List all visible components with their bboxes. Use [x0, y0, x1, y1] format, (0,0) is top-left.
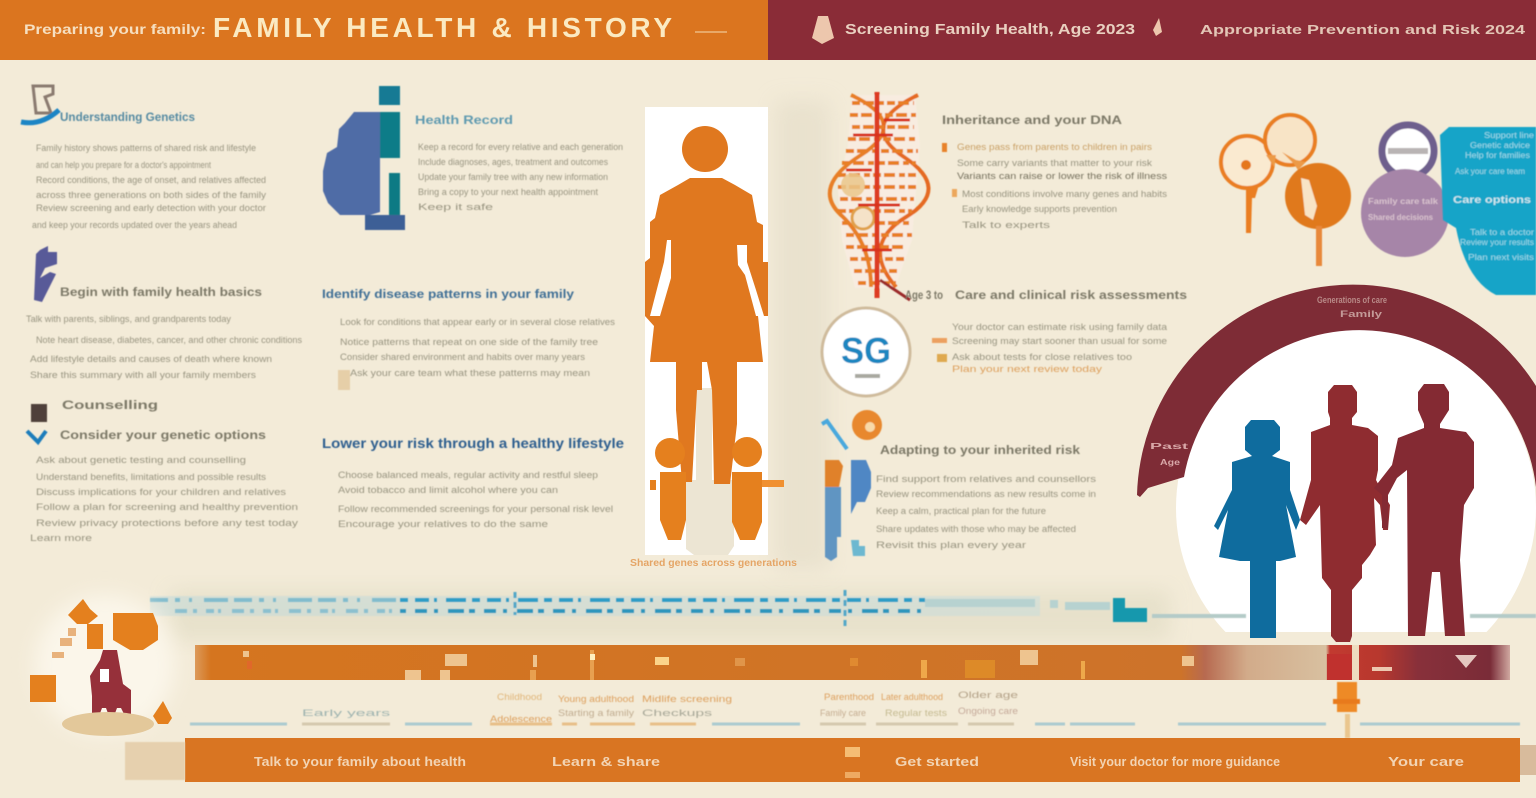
panel: second column lower	[322, 435, 624, 529]
body text: Ask about genetic testing and counselling	[36, 455, 246, 465]
body text: Talk with parents, siblings, and grandparents today	[26, 314, 231, 324]
body text: Look for conditions that appear early or in several close relatives	[340, 317, 616, 327]
body text: Choose balanced meals, regular activity and restful sleep	[338, 470, 598, 480]
footer bar: Visit your doctor for more guidance	[1070, 754, 1280, 769]
rule lines	[190, 722, 1520, 726]
orange adult figure	[645, 126, 768, 484]
body text: Talk to experts	[962, 220, 1051, 230]
body text	[26, 314, 302, 380]
icon: person with swoosh	[21, 86, 59, 123]
header kicker text: Preparing your family:	[24, 21, 206, 37]
footer bar: Your care	[1388, 754, 1464, 769]
purple circle	[1361, 169, 1449, 257]
icon: note	[338, 370, 350, 390]
family circle panel	[1137, 284, 1536, 642]
timeline captions: Ongoing care	[958, 706, 1018, 716]
timeline captions: Childhood	[497, 692, 542, 702]
panel: purple circles: Shared decisions	[1368, 213, 1434, 222]
beige floor between figures	[686, 388, 734, 555]
body text: Learn more	[30, 533, 92, 543]
body text	[338, 470, 613, 529]
body text: Encourage your relatives to do the same	[338, 519, 548, 529]
DNA strip	[150, 590, 1536, 628]
maroon man silhouette	[1374, 384, 1474, 636]
body text: across three generations on both sides of the family	[36, 190, 267, 200]
cyan callout text: Talk to a doctor	[1470, 228, 1534, 237]
panel: right-centre top	[942, 113, 1168, 230]
panel: purple circles: Family care talk	[1368, 197, 1439, 206]
heading: Consider your genetic options	[60, 428, 266, 442]
body text: Record conditions, the age of onset, and relatives affected	[36, 175, 266, 185]
body text: Note heart disease, diabetes, cancer, and other chronic conditions	[36, 335, 302, 345]
body text: Follow recommended screenings for your personal risk level	[338, 504, 613, 514]
body text: Understand benefits, limitations and possible results	[36, 472, 267, 482]
body text: Early knowledge supports prevention	[962, 204, 1117, 214]
timeline captions: Adolescence	[490, 714, 552, 724]
footer text: Talk to your family about health	[254, 754, 466, 769]
body text	[32, 143, 267, 230]
body text: Share this summary with all your family members	[30, 370, 257, 380]
timeline captions: Young adulthood	[558, 694, 634, 704]
footer bar	[125, 738, 1536, 782]
timeline markers	[243, 650, 1194, 680]
body text: Variants can raise or lower the risk of illness	[957, 171, 1168, 181]
subheading: Counselling	[62, 398, 158, 412]
body text	[30, 455, 299, 543]
body text: Screening may start sooner than usual for some	[952, 336, 1167, 346]
body text: Keep it safe	[418, 202, 493, 212]
bullets	[942, 143, 957, 197]
arc label: Generations of care	[1317, 295, 1387, 305]
blue child silhouette	[1214, 420, 1300, 638]
body text: Most conditions involve many genes and habits	[962, 189, 1168, 199]
icon: pen	[34, 246, 57, 302]
panel: cyan callouts	[1440, 127, 1536, 295]
body text: Plan your next review today	[952, 364, 1103, 374]
body text: Avoid tobacco and limit alcohol where you can	[338, 485, 558, 495]
panel: cyan callouts: Care options	[1453, 195, 1532, 206]
cyan callout text: Review your results	[1460, 238, 1534, 247]
cyan callout text: Support line	[1484, 131, 1535, 140]
footer bar: Learn & share	[552, 754, 660, 769]
heading: Understanding Genetics	[60, 110, 195, 124]
heading: Lower your risk through a healthy lifestyle	[322, 435, 624, 451]
cyan callout text: Ask your care team	[1455, 167, 1525, 176]
body text: Consider shared environment and habits over many years	[340, 352, 586, 362]
panel: left column lower	[27, 398, 299, 543]
body text: and keep your records updated over the years ahead	[32, 220, 237, 230]
heading: Identify disease patterns in your family	[322, 287, 574, 301]
footer bar: Get started	[895, 754, 979, 769]
maroon markers	[1327, 645, 1477, 680]
panel: purple circles	[1361, 125, 1449, 257]
panel: second column middle	[322, 287, 616, 390]
body text: Keep a calm, practical plan for the future	[876, 506, 1046, 516]
timeline bar	[195, 645, 1510, 680]
cyan callout text: Plan next visits	[1468, 253, 1534, 262]
timeline captions: Early years	[302, 708, 391, 718]
timeline captions: Starting a family	[558, 708, 635, 718]
main title: FAMILY HEALTH & HISTORY	[213, 12, 672, 43]
orange pin	[1333, 682, 1360, 738]
body text: Review screening and early detection with your doctor	[36, 203, 266, 213]
body text: Bring a copy to your next health appointment	[418, 187, 598, 197]
timeline captions: Later adulthood	[881, 692, 943, 702]
cyan callout text	[1455, 131, 1535, 262]
orange child right	[732, 437, 784, 540]
panel: left column middle	[26, 246, 302, 380]
body text: Your doctor can estimate risk using family data	[952, 322, 1167, 332]
body text: Genes pass from parents to children in pairs	[957, 142, 1153, 152]
heading: Health Record	[415, 113, 513, 127]
panel: left column top	[21, 86, 267, 230]
small text before heading: Age 3 to	[905, 288, 943, 302]
heading: Adapting to your inherited risk	[880, 443, 1080, 457]
arc label: Past	[1150, 442, 1189, 451]
orange blocks	[30, 599, 172, 724]
central figure panel	[630, 107, 797, 569]
body text: Family history shows patterns of shared risk and lifestyle	[36, 143, 256, 153]
grey ring	[1382, 125, 1434, 177]
icon: header mark	[1153, 18, 1162, 36]
badge: SG: SG	[841, 330, 891, 371]
body text	[418, 142, 623, 212]
arc label	[1150, 295, 1387, 467]
heading: Inheritance and your DNA	[942, 113, 1122, 127]
body text	[876, 474, 1097, 550]
panel: second column top	[323, 86, 623, 230]
body text: Revisit this plan every year	[876, 540, 1026, 550]
header: maroon info band	[768, 0, 1536, 60]
timeline captions: Regular tests	[885, 708, 948, 718]
body text: Include diagnoses, ages, treatment and outcomes	[418, 157, 608, 167]
timeline captions: Family care	[820, 708, 866, 718]
horizon lines	[1152, 614, 1536, 618]
body text: Notice patterns that repeat on one side of the family tree	[340, 337, 598, 347]
arc label: Age	[1160, 458, 1181, 467]
white glow	[1176, 330, 1536, 632]
icon: small person check	[27, 404, 47, 442]
body text	[957, 142, 1168, 230]
timeline captions: Checkups	[642, 708, 713, 718]
footer fade left	[125, 742, 185, 780]
body text: Some carry variants that matter to your risk	[957, 158, 1153, 168]
ground shadow	[62, 712, 154, 736]
body text: Review privacy protections before any test today	[36, 518, 299, 528]
body text	[340, 317, 616, 378]
cyan callout text: Help for families	[1465, 151, 1530, 160]
badge: SG	[822, 308, 910, 396]
body text: Ask about tests for close relatives too	[952, 352, 1132, 362]
icon: orange gear and blue arm	[822, 410, 882, 561]
orange child left	[650, 438, 686, 540]
timeline captions: Parenthood	[824, 692, 874, 702]
body text: Find support from relatives and counsellors	[876, 474, 1097, 484]
heading: Care and clinical risk assessments	[955, 288, 1187, 302]
header centre text: Screening Family Health, Age 2023	[845, 21, 1135, 38]
bullets	[932, 338, 947, 362]
timeline captions: Older age	[958, 690, 1018, 700]
body text: Ask your care team what these patterns may mean	[350, 368, 590, 378]
body text: Keep a record for every relative and each generation	[418, 142, 623, 152]
arc label: Family	[1340, 309, 1382, 319]
icon: seated blue figure	[323, 86, 405, 230]
body text: Review recommendations as new results come in	[876, 489, 1096, 499]
footer fade right	[1520, 745, 1536, 775]
maroon stroller figure	[90, 650, 131, 716]
header rule	[695, 31, 727, 33]
cyan callout text: Genetic advice	[1470, 141, 1531, 150]
white arm slits	[650, 240, 764, 316]
icon: header figure	[812, 16, 834, 44]
timeline captions: Midlife screening	[642, 694, 732, 704]
body text: Update your family tree with any new information	[418, 172, 608, 182]
body text: and can help you prepare for a doctor's appointment	[36, 160, 211, 170]
panel: right-centre lower	[822, 410, 1097, 561]
body text: Add lifestyle details and causes of death where known	[30, 354, 272, 364]
header right text: Appropriate Prevention and Risk 2024	[1200, 22, 1526, 37]
DNA helix	[830, 92, 929, 300]
heading: Begin with family health basics	[60, 285, 262, 299]
body text: Share updates with those who may be affected	[876, 524, 1076, 534]
timeline captions	[190, 682, 1520, 738]
maroon woman silhouette	[1300, 385, 1390, 642]
maroon arc	[1137, 285, 1536, 497]
icon: orange collage bottom-left	[30, 595, 175, 736]
small leaf marks	[52, 628, 76, 658]
strip end marker	[1113, 598, 1147, 622]
panel: right-centre middle	[822, 288, 1187, 396]
header: orange title band	[0, 0, 768, 60]
body text	[952, 322, 1167, 374]
caption: Shared genes across generations	[630, 558, 797, 569]
icon: orange tree	[1221, 115, 1351, 266]
body text: Follow a plan for screening and healthy prevention	[36, 502, 298, 512]
footer icon	[845, 747, 860, 778]
body text: Discuss implications for your children and relatives	[36, 487, 287, 497]
